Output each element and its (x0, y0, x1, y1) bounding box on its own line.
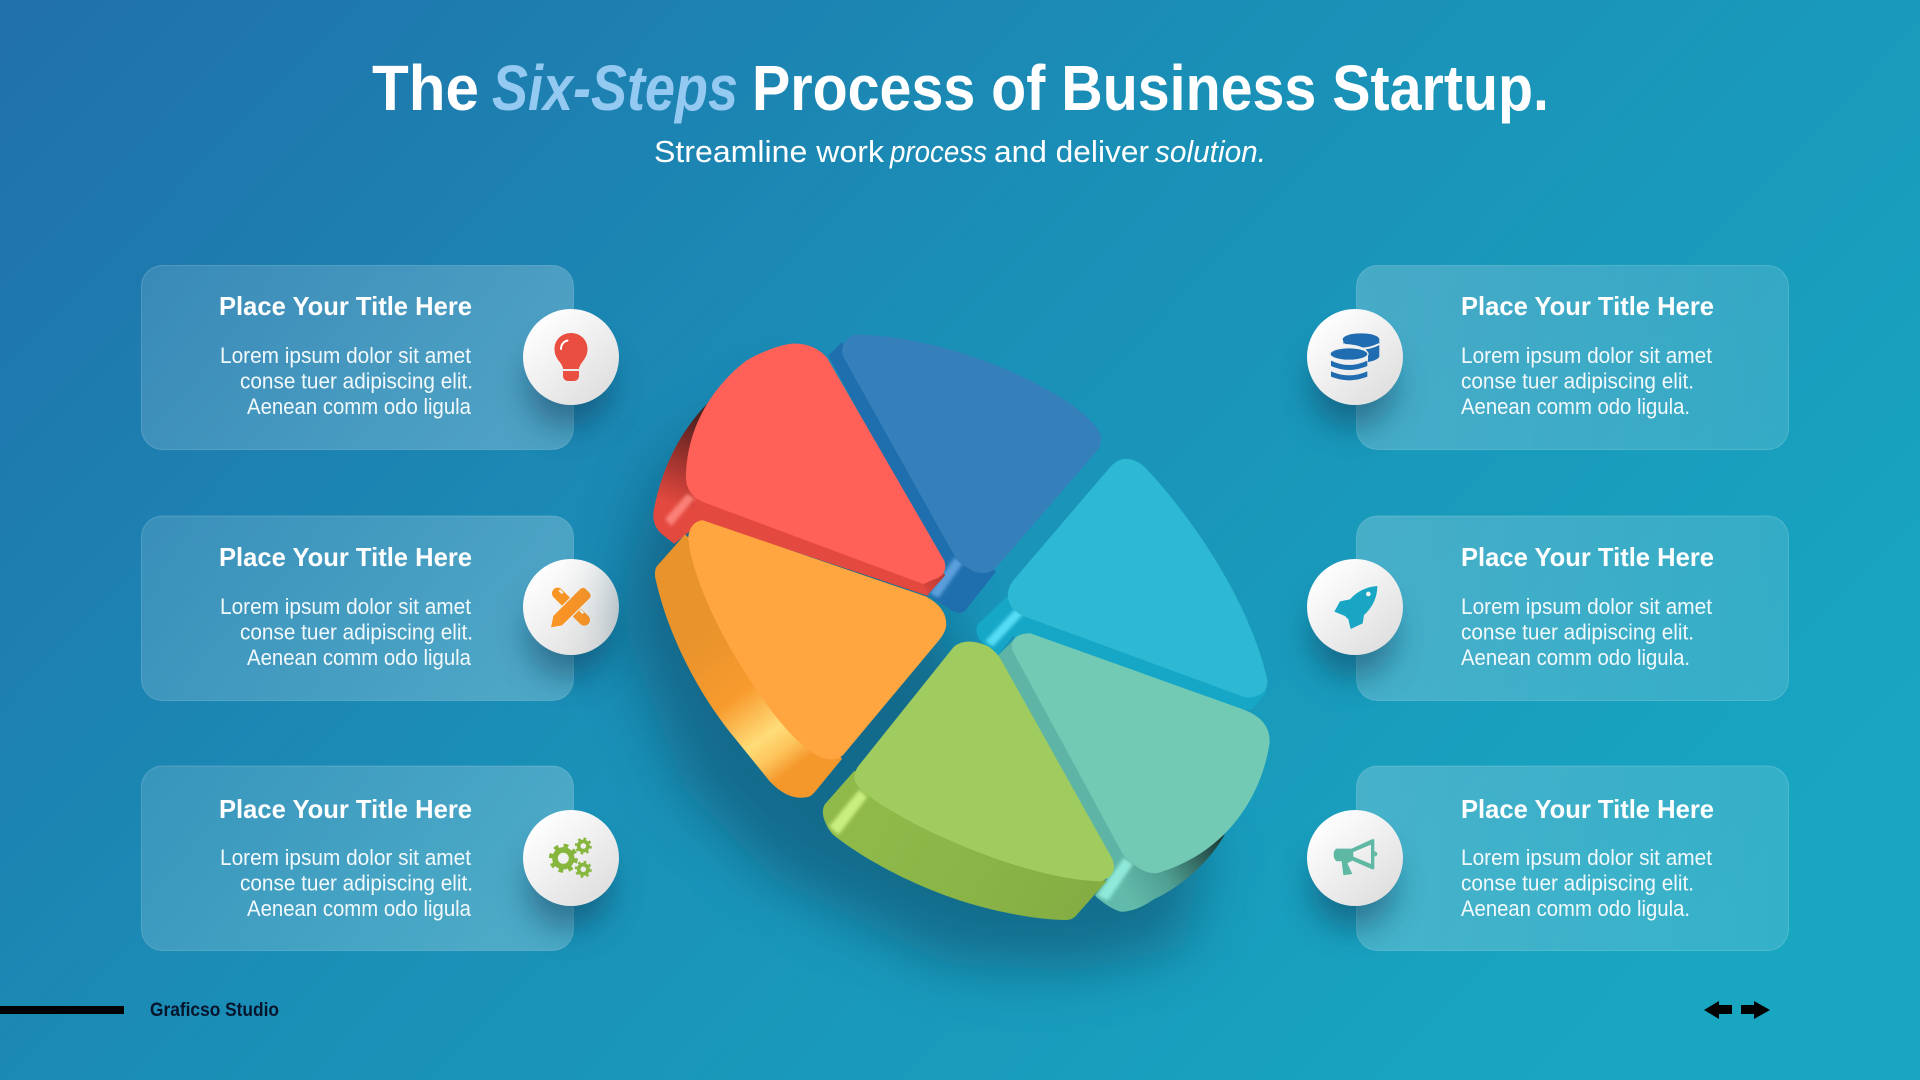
title: The (372, 52, 479, 124)
card 6: right bottom: conse tuer adipiscing elit. (1461, 870, 1694, 896)
segment: blue (828, 334, 1101, 613)
card 2: left middle: conse tuer adipiscing elit. (240, 620, 473, 644)
card 2: left middle: Lorem ipsum dolor sit amet (220, 594, 471, 619)
card 4: right top (1356, 266, 1788, 450)
card 6: right bottom: Lorem ipsum dolor sit amet (1461, 845, 1712, 870)
icon disc: pencil and ruler (523, 559, 619, 677)
card 4: right top: Place Your Title Here (1461, 291, 1714, 321)
segment: orange (655, 520, 946, 798)
icon disc: megaphone (1307, 810, 1403, 928)
title: Process of Business Startup. (752, 52, 1549, 124)
title (372, 52, 1549, 124)
card 2: left middle (142, 516, 574, 700)
icon disc: gears (523, 810, 619, 928)
icon disc: rocket (1307, 559, 1403, 677)
card 3: left bottom: Lorem ipsum dolor sit amet (220, 845, 471, 870)
card 6: right bottom (1356, 766, 1788, 950)
pie shadow (624, 396, 1205, 971)
card 3: left bottom: Place Your Title Here (219, 794, 472, 824)
card 4: right top: Lorem ipsum dolor sit amet (1461, 343, 1712, 368)
card 4: right top: Aenean comm odo ligula. (1461, 394, 1690, 419)
title: Six-Steps (492, 52, 738, 124)
subtitle (654, 134, 1266, 169)
card 3: left bottom: conse tuer adipiscing elit. (240, 870, 473, 896)
segment: green (823, 642, 1114, 920)
card 5: right middle: Aenean comm odo ligula. (1461, 645, 1690, 670)
subtitle: solution. (1155, 134, 1266, 169)
icon disc: light bulb (523, 309, 619, 427)
card 6: right bottom: Aenean comm odo ligula. (1461, 896, 1690, 921)
card 3: left bottom (142, 766, 574, 950)
footer bar (0, 1006, 124, 1014)
segment: teal (996, 633, 1270, 912)
footer label: Graficso Studio (150, 1000, 279, 1021)
card 1: left top: conse tuer adipiscing elit. (240, 368, 473, 394)
card 4: right top: conse tuer adipiscing elit. (1461, 368, 1694, 394)
card 1: left top (142, 266, 574, 450)
card 5: right middle: conse tuer adipiscing elit. (1461, 620, 1694, 644)
card 1: left top: Lorem ipsum dolor sit amet (220, 343, 471, 368)
subtitle: Streamline work (654, 134, 885, 169)
segment: red (653, 343, 945, 596)
subtitle: and deliver (994, 134, 1149, 169)
card 1: left top: Aenean comm odo ligula (247, 394, 472, 419)
icon disc: coins (1307, 309, 1403, 427)
subtitle: process (889, 134, 987, 169)
card 6: right bottom: Place Your Title Here (1461, 794, 1714, 824)
card 2: left middle: Aenean comm odo ligula (247, 645, 472, 670)
3D segmented pie chart (653, 334, 1270, 920)
card 3: left bottom: Aenean comm odo ligula (247, 896, 472, 921)
navigation arrows (1704, 1001, 1770, 1019)
card 5: right middle (1356, 516, 1788, 700)
segment: cyan (976, 459, 1267, 710)
card 5: right middle: Lorem ipsum dolor sit amet (1461, 594, 1712, 619)
card 1: left top: Place Your Title Here (219, 291, 472, 321)
card 5: right middle: Place Your Title Here (1461, 542, 1714, 572)
card 2: left middle: Place Your Title Here (219, 542, 472, 572)
